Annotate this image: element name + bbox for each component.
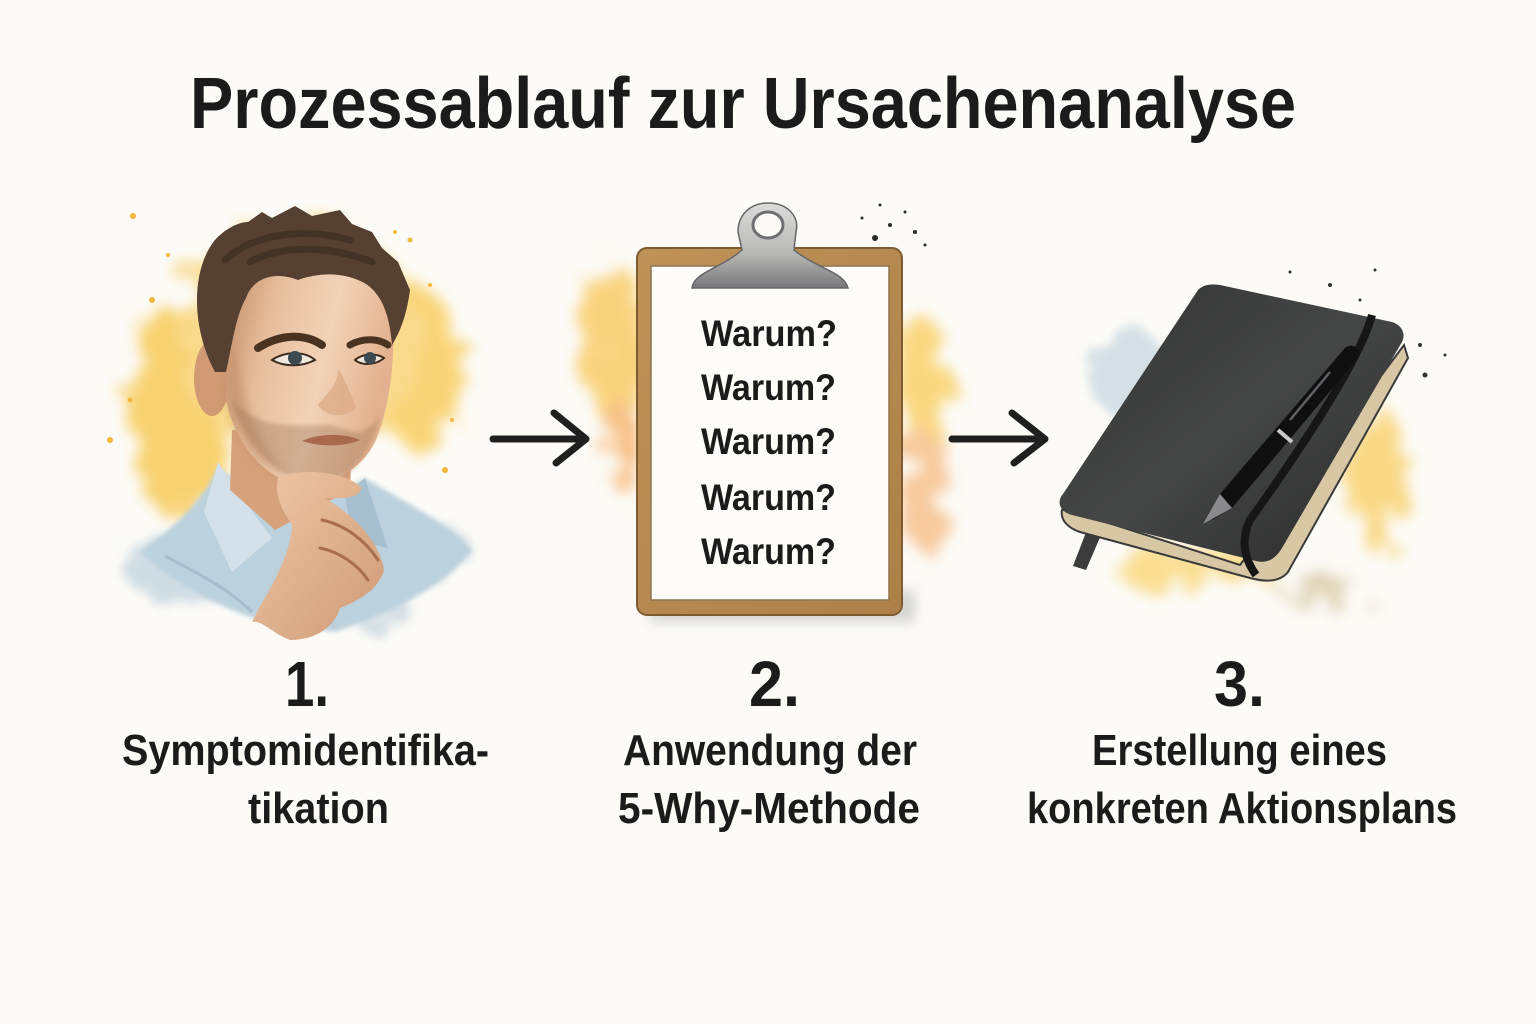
arrow 1 (493, 413, 586, 463)
watercolor splash: blue under shirt (123, 524, 472, 629)
step 1: thinking man illustration (107, 206, 472, 640)
step 1 label (122, 648, 489, 833)
cover (1060, 285, 1404, 562)
neck (230, 430, 352, 530)
step 2 label: 2. (749, 648, 800, 720)
ink speckles (1288, 268, 1446, 378)
metal clip (692, 203, 848, 288)
why list: Warum? (701, 313, 837, 354)
step 2: clipboard illustration (583, 203, 949, 622)
step 1 label: tikation (248, 784, 389, 833)
title: Prozessablauf zur Ursachenanalyse (190, 64, 1296, 144)
step 2 label: 5-Why-Methode (618, 784, 920, 833)
step 3 label: 3. (1214, 648, 1265, 720)
step 3 label: Erstellung eines (1092, 726, 1387, 775)
nose (318, 368, 356, 415)
pen (1203, 346, 1359, 524)
elastic band (1245, 315, 1372, 575)
step 1 label: 1. (285, 648, 329, 720)
watercolor splash: yellow behind man (128, 220, 462, 520)
step 1 label: Symptomidentifika- (122, 726, 489, 775)
face (226, 269, 393, 485)
step 2 label (618, 648, 920, 833)
why list (701, 313, 837, 572)
watercolor splash: yellow (1110, 405, 1408, 602)
arrow 2 (952, 413, 1045, 463)
ribbon bookmark (1073, 522, 1104, 570)
why list: Warum? (701, 421, 836, 462)
watercolor splash: yellow orange (583, 265, 949, 550)
hair (197, 206, 410, 372)
eyes (272, 353, 315, 365)
ear (194, 340, 230, 416)
step 2 label: Anwendung der (623, 726, 917, 775)
step 3 label (1027, 648, 1457, 833)
stubble (232, 400, 380, 482)
eyebrows (258, 337, 322, 348)
yellow spatter dots (107, 213, 454, 473)
board shadow (650, 590, 915, 622)
why list: Warum? (701, 367, 836, 408)
ink speckles (860, 204, 926, 246)
step 3: notebook illustration (1060, 268, 1446, 602)
watercolor splash: blue (1090, 330, 1170, 420)
why list: Warum? (701, 477, 836, 518)
shirt (140, 462, 472, 632)
clipboard board (637, 248, 902, 615)
hand on chin (252, 472, 384, 640)
step 3 label: konkreten Aktionsplans (1027, 784, 1457, 833)
mouth (302, 435, 360, 445)
page block (1062, 345, 1408, 580)
why list: Warum? (701, 531, 836, 572)
paper sheet (651, 266, 889, 600)
cheek shadow (226, 330, 290, 478)
